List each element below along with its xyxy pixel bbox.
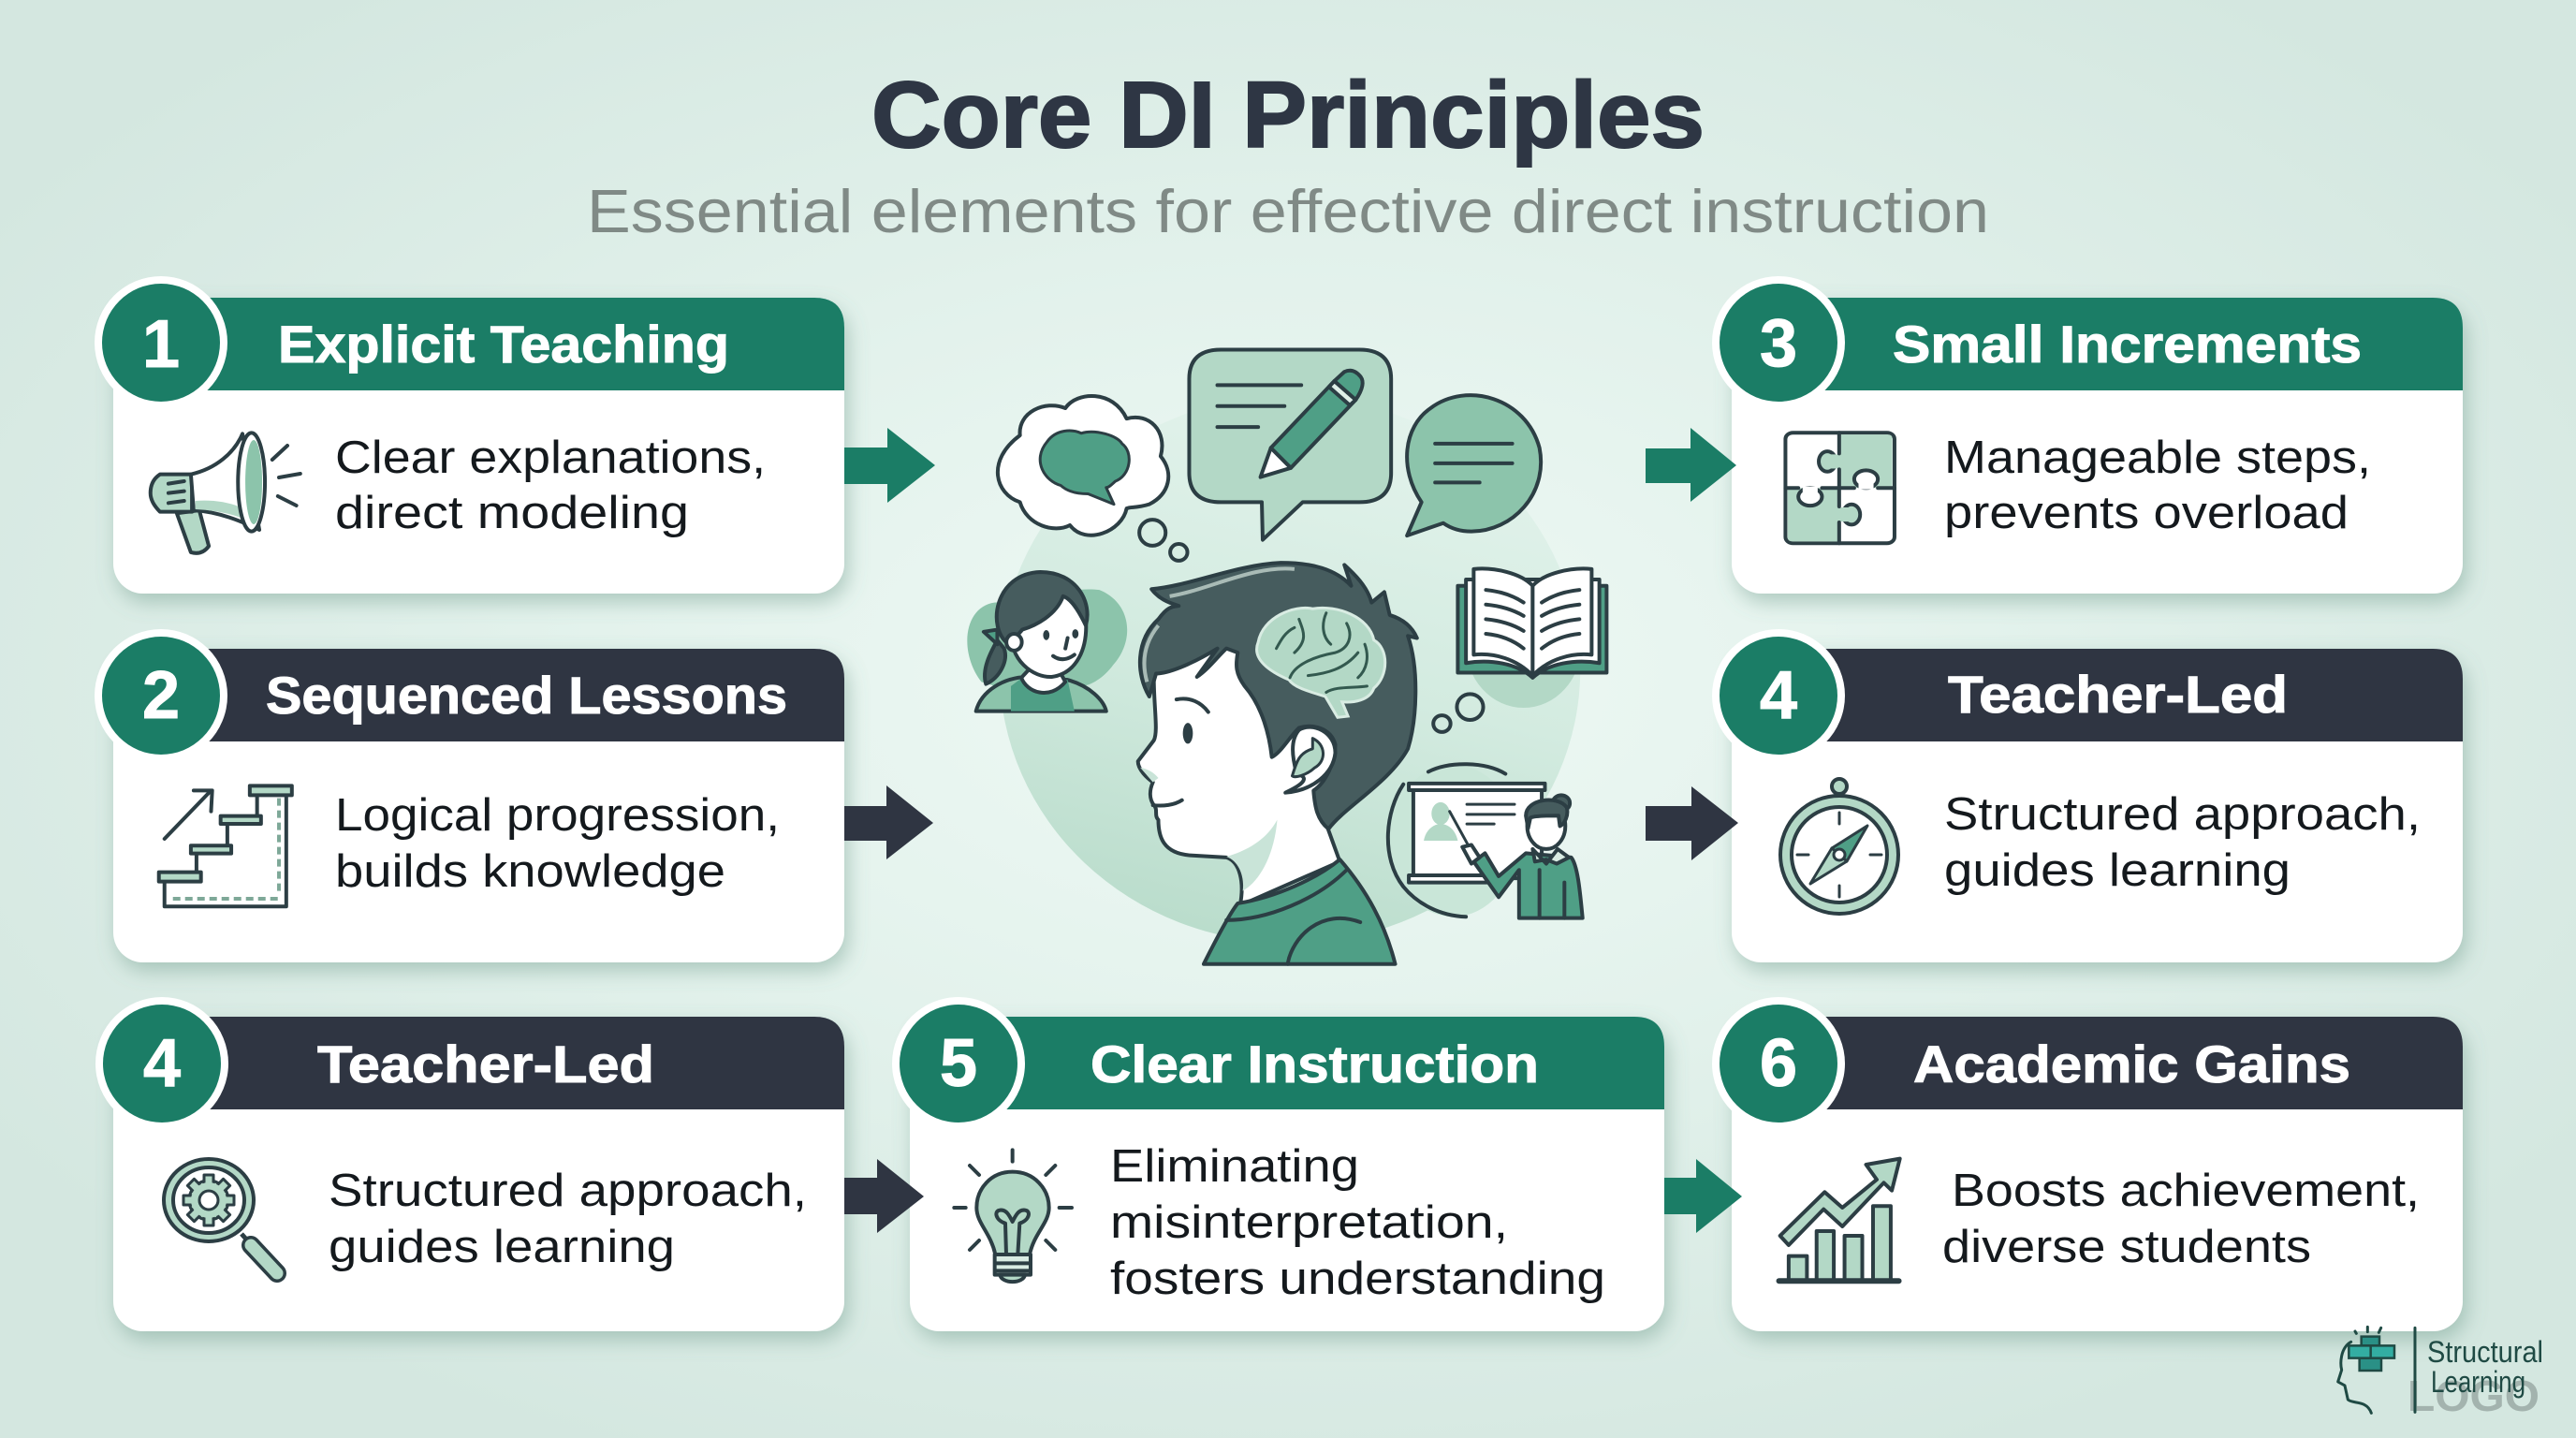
description: guides learning (1944, 845, 2291, 896)
heading: Explicit Teaching (278, 315, 729, 374)
panel: 1 Explicit Teaching (95, 276, 844, 594)
wordmark: Structural (2427, 1335, 2543, 1369)
heading: Sequenced Lessons (266, 666, 787, 725)
icon: magnifier gear (164, 1159, 277, 1273)
panel: 4 Teacher-Led right (1712, 629, 2463, 962)
icon: light bulb (954, 1150, 1072, 1282)
shirt (1204, 859, 1396, 964)
description: guides learning (329, 1222, 675, 1272)
panel: 4 Teacher-Led right: 4 (1760, 658, 1797, 733)
icon: head with blocks (2338, 1327, 2415, 1413)
thought cloud with brain (998, 396, 1188, 561)
arrow centre to card 3 (1646, 428, 1736, 502)
panel: 2 Sequenced Lessons (95, 629, 844, 962)
description: fosters understanding (1110, 1254, 1605, 1304)
description: Logical progression, (335, 790, 780, 841)
watermark LOGO text: LOGO (2408, 1372, 2539, 1420)
round speech bubble (1407, 395, 1541, 536)
hair (1140, 563, 1417, 829)
face details (1183, 723, 1193, 743)
description: builds knowledge (335, 846, 725, 897)
ear (1285, 727, 1336, 793)
heading: Small Increments (1893, 315, 2362, 374)
brain (1257, 608, 1385, 717)
open book (1433, 568, 1606, 732)
icon: megaphone (151, 433, 300, 553)
panel: 4 Teacher-Led left: 4 (143, 1026, 181, 1101)
boy head in profile (1138, 563, 1417, 964)
icon: stairs (159, 785, 292, 906)
logo: Structural Learning (2338, 1327, 2543, 1420)
panel: 6 Academic Gains: 6 (1760, 1026, 1797, 1101)
panel: 1 Explicit Teaching: 1 (142, 307, 180, 382)
icon: growth chart (1779, 1159, 1900, 1281)
description: direct modeling (335, 488, 689, 538)
speech bubble with pencil (1189, 349, 1391, 540)
description: prevents overload (1944, 488, 2349, 538)
panel: 3 Small Increments (1712, 276, 2463, 594)
central illustration (967, 349, 1606, 964)
panel: 5 Clear Instruction (892, 997, 1664, 1331)
panel: 2 Sequenced Lessons: 2 (142, 658, 180, 733)
panel: 6 Academic Gains (1712, 997, 2463, 1331)
description: Manageable steps, (1944, 433, 2371, 483)
panel: 5 Clear Instruction: 5 (940, 1026, 977, 1101)
arrow 2 to centre (844, 785, 933, 859)
description: Clear explanations, (335, 433, 766, 483)
description: misinterpretation, (1110, 1197, 1508, 1248)
description: Structured approach, (1944, 789, 2421, 840)
description: Boosts achievement, (1952, 1166, 2420, 1216)
panel: 4 Teacher-Led left (95, 997, 844, 1331)
subtitle: Essential elements for effective direct instruction (587, 177, 1989, 245)
icon: compass (1780, 779, 1898, 914)
arrow centre to card 4 (1646, 786, 1738, 860)
heading: Clear Instruction (1090, 1034, 1539, 1093)
student girl (967, 572, 1127, 712)
description: diverse students (1942, 1222, 2311, 1272)
arrow card 5 to card 6 (1664, 1159, 1742, 1233)
arrow 4 to card 5 (844, 1159, 924, 1233)
icon: puzzle (1785, 433, 1895, 543)
wordmark: Learning (2431, 1365, 2525, 1399)
heading: Teacher-Led (1948, 665, 2288, 724)
background disc (1000, 396, 1580, 943)
title: Core DI Principles (871, 63, 1705, 168)
description: Structured approach, (329, 1166, 807, 1216)
teacher at whiteboard (1388, 764, 1583, 918)
arrow 1 to centre (844, 428, 935, 503)
heading: Academic Gains (1913, 1034, 2350, 1093)
description: Eliminating (1110, 1141, 1359, 1192)
heading: Teacher-Led (317, 1034, 654, 1093)
panel: 3 Small Increments: 3 (1760, 306, 1797, 381)
